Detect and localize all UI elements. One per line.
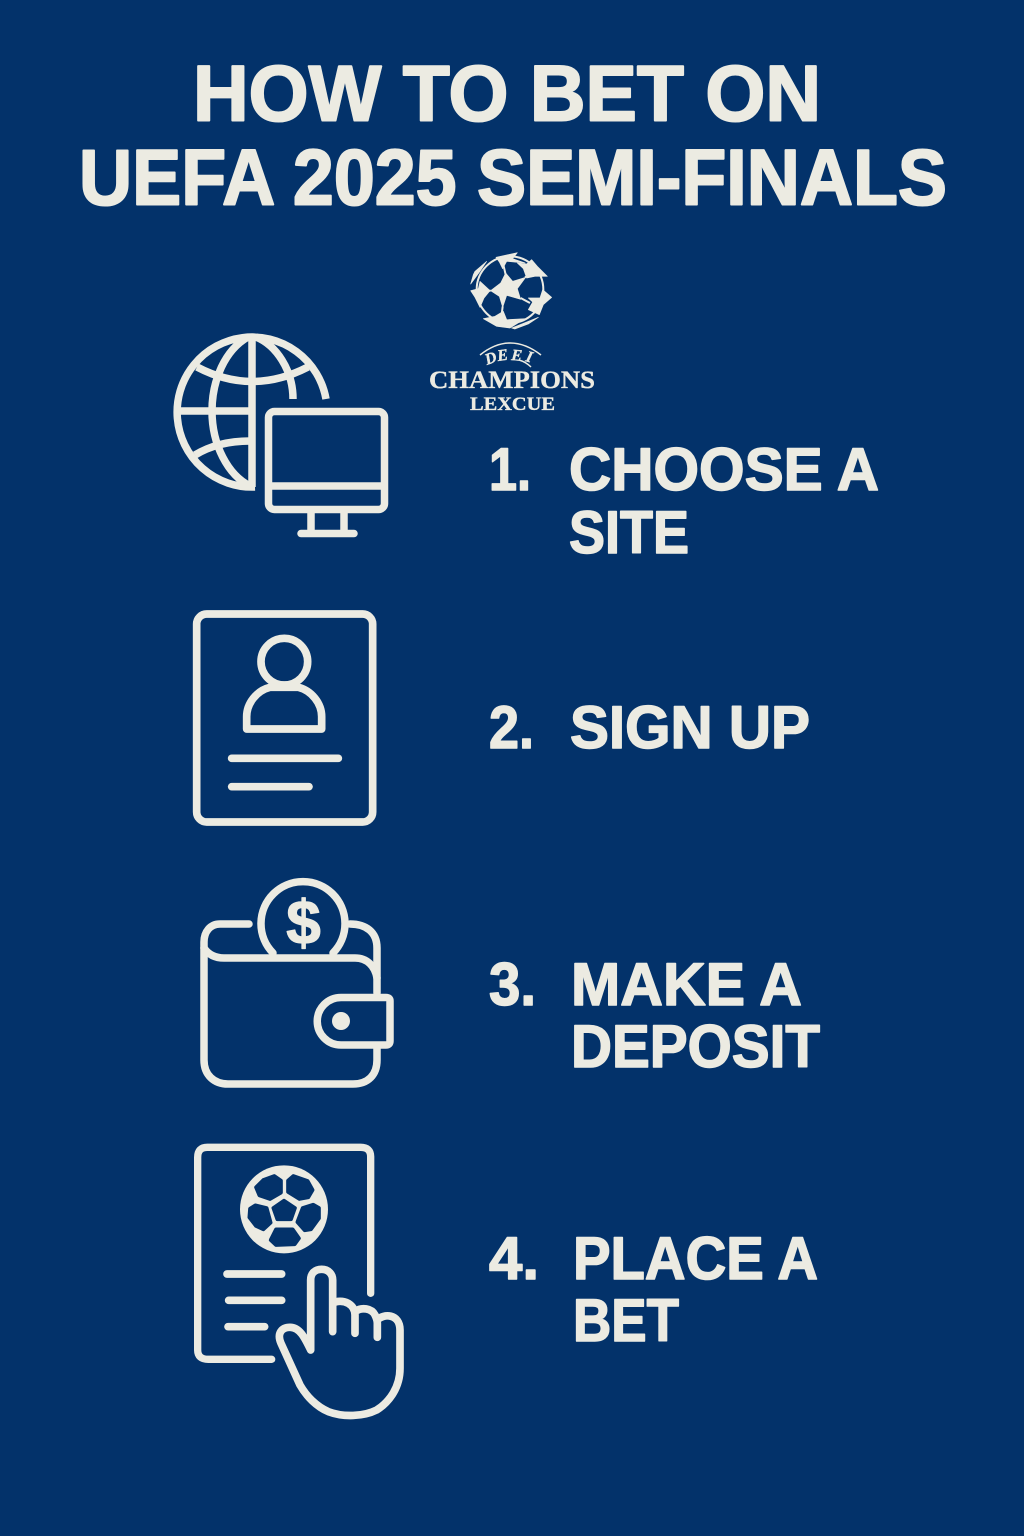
- title: HOW TO BET ON: [193, 48, 821, 138]
- step 3 text: [489, 951, 820, 1080]
- step 2 text: 2.: [489, 694, 534, 761]
- dollar sign: $: [286, 889, 321, 958]
- slip outline: [198, 1147, 371, 1359]
- pointing hand: [279, 1269, 400, 1415]
- step 3 text: 3.: [489, 951, 536, 1018]
- football: [240, 1165, 328, 1253]
- step 2 text: SIGN UP: [570, 694, 810, 761]
- icon: profile card: [197, 614, 373, 822]
- step 1 text: 1.: [489, 436, 531, 503]
- step 1 text: CHOOSE A: [569, 436, 879, 503]
- logo: lexcue text: LEXCUE: [470, 394, 555, 415]
- monitor: [268, 412, 384, 534]
- coin: [261, 882, 345, 953]
- text lines: [227, 1274, 282, 1327]
- clasp: [317, 998, 390, 1045]
- step 3 text: MAKE A: [571, 951, 802, 1018]
- logo: champions league: [429, 253, 595, 415]
- step 4 text: 4.: [489, 1225, 539, 1292]
- icon: globe and monitor: [177, 336, 384, 534]
- logo: arched wordmark: D: [482, 349, 500, 369]
- title: UEFA 2025 SEMI-FINALS: [79, 132, 947, 222]
- step 1 text: SITE: [569, 499, 689, 566]
- step 1 text: [489, 436, 879, 566]
- wallet body: [204, 924, 377, 1084]
- logo: arched wordmark: I: [523, 348, 535, 367]
- logo: champions text: CHAMPIONS: [429, 367, 595, 394]
- logo: arched wordmark: [480, 343, 541, 369]
- logo: starball: [471, 253, 552, 329]
- icon: wallet with coin: [204, 882, 390, 1084]
- logo: arched wordmark: E: [510, 347, 523, 365]
- step 4 text: PLACE A: [573, 1225, 818, 1292]
- logo: arched wordmark: E: [495, 347, 509, 365]
- step 3 text: DEPOSIT: [571, 1013, 820, 1080]
- step 4 text: [489, 1225, 818, 1354]
- title: [79, 48, 947, 222]
- step 4 text: BET: [573, 1287, 679, 1354]
- globe: [177, 336, 326, 487]
- icon: bet slip with ball and hand: [198, 1147, 400, 1415]
